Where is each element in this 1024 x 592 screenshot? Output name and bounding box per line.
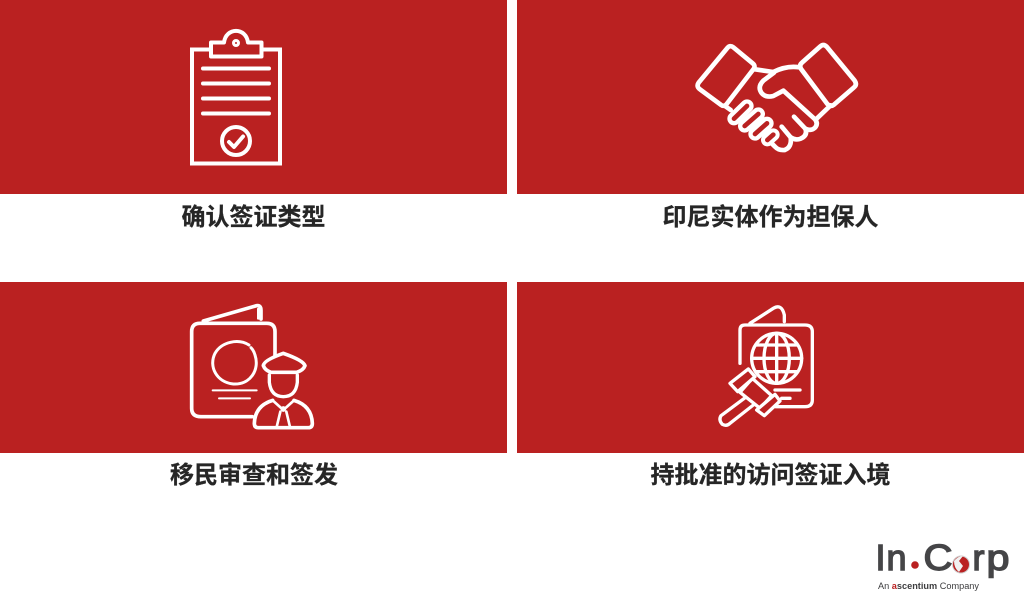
heading: enter with approved visa: 持批准的访问签证入境 xyxy=(650,462,890,489)
logo: InCorp: r xyxy=(972,537,984,578)
heading: confirm visa type: 确认签证类型 xyxy=(182,204,326,231)
heading: Indonesian sponsor: 印尼实体作为担保人 xyxy=(662,204,878,231)
logo: InCorp: I xyxy=(876,537,886,578)
icon: passport and officer xyxy=(192,306,312,428)
logo: InCorp: C xyxy=(924,537,952,578)
heading: immigration review and issuance: 移民审查和签发 xyxy=(170,462,338,489)
panel: bottom right xyxy=(517,282,1024,453)
panel: top left xyxy=(0,0,507,194)
logo: InCorp: n xyxy=(886,537,907,578)
panel: bottom left xyxy=(0,282,507,453)
icon: handshake xyxy=(698,45,856,150)
icon: passport with globe and gavel xyxy=(720,307,812,425)
icon: clipboard with check xyxy=(192,31,280,164)
logo: InCorp xyxy=(876,537,1010,591)
logo: InCorp: p xyxy=(986,537,1010,578)
logo: InCorp: An ascentium Company xyxy=(878,581,979,591)
panel: top right xyxy=(517,0,1024,194)
